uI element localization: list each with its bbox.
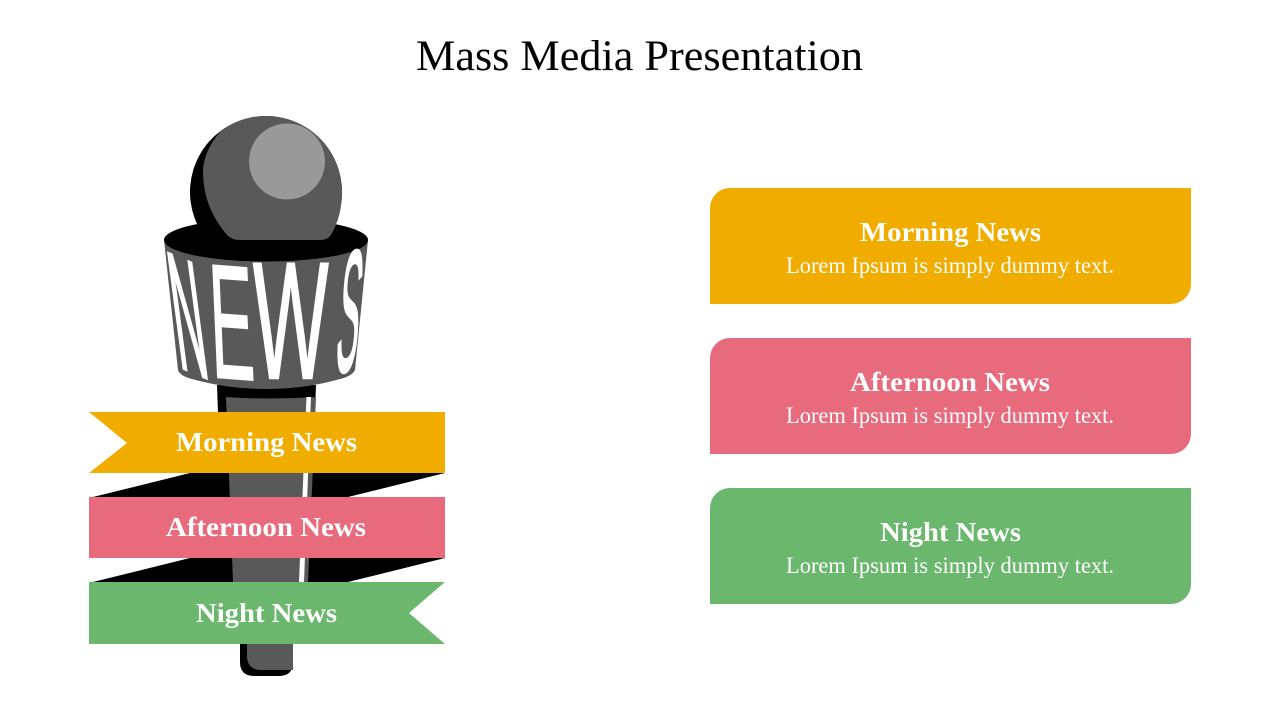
ribbon: night news: Night News [196,598,337,628]
NEWS lettering: E [206,230,258,416]
ribbon folds [93,473,445,582]
ribbon: morning news: Morning News [176,427,357,457]
panel: afternoon news [710,338,1191,454]
body text: Lorem Ipsum is simply dummy text. [786,403,1114,428]
panel: morning news [710,188,1191,304]
NEWS lettering: S [331,213,370,411]
microphone handle [217,385,316,676]
ribbon: night news [89,582,445,644]
NEWS lettering: W [253,228,329,414]
NEWS lettering: N [160,216,215,414]
heading: Night News [880,517,1021,547]
microphone ball [190,116,342,255]
ribbon: morning news [89,412,445,473]
panel: night news [710,488,1191,604]
title: Mass Media Presentation [416,33,863,80]
ribbon: afternoon news: Afternoon News [166,512,366,542]
news cup [160,213,370,416]
NEWS lettering [160,213,370,416]
heading: Afternoon News [850,367,1050,397]
ribbon: afternoon news [89,497,445,558]
icon: news microphone [160,116,370,676]
heading: Morning News [860,217,1041,247]
body text: Lorem Ipsum is simply dummy text. [786,553,1114,578]
body text: Lorem Ipsum is simply dummy text. [786,253,1114,278]
